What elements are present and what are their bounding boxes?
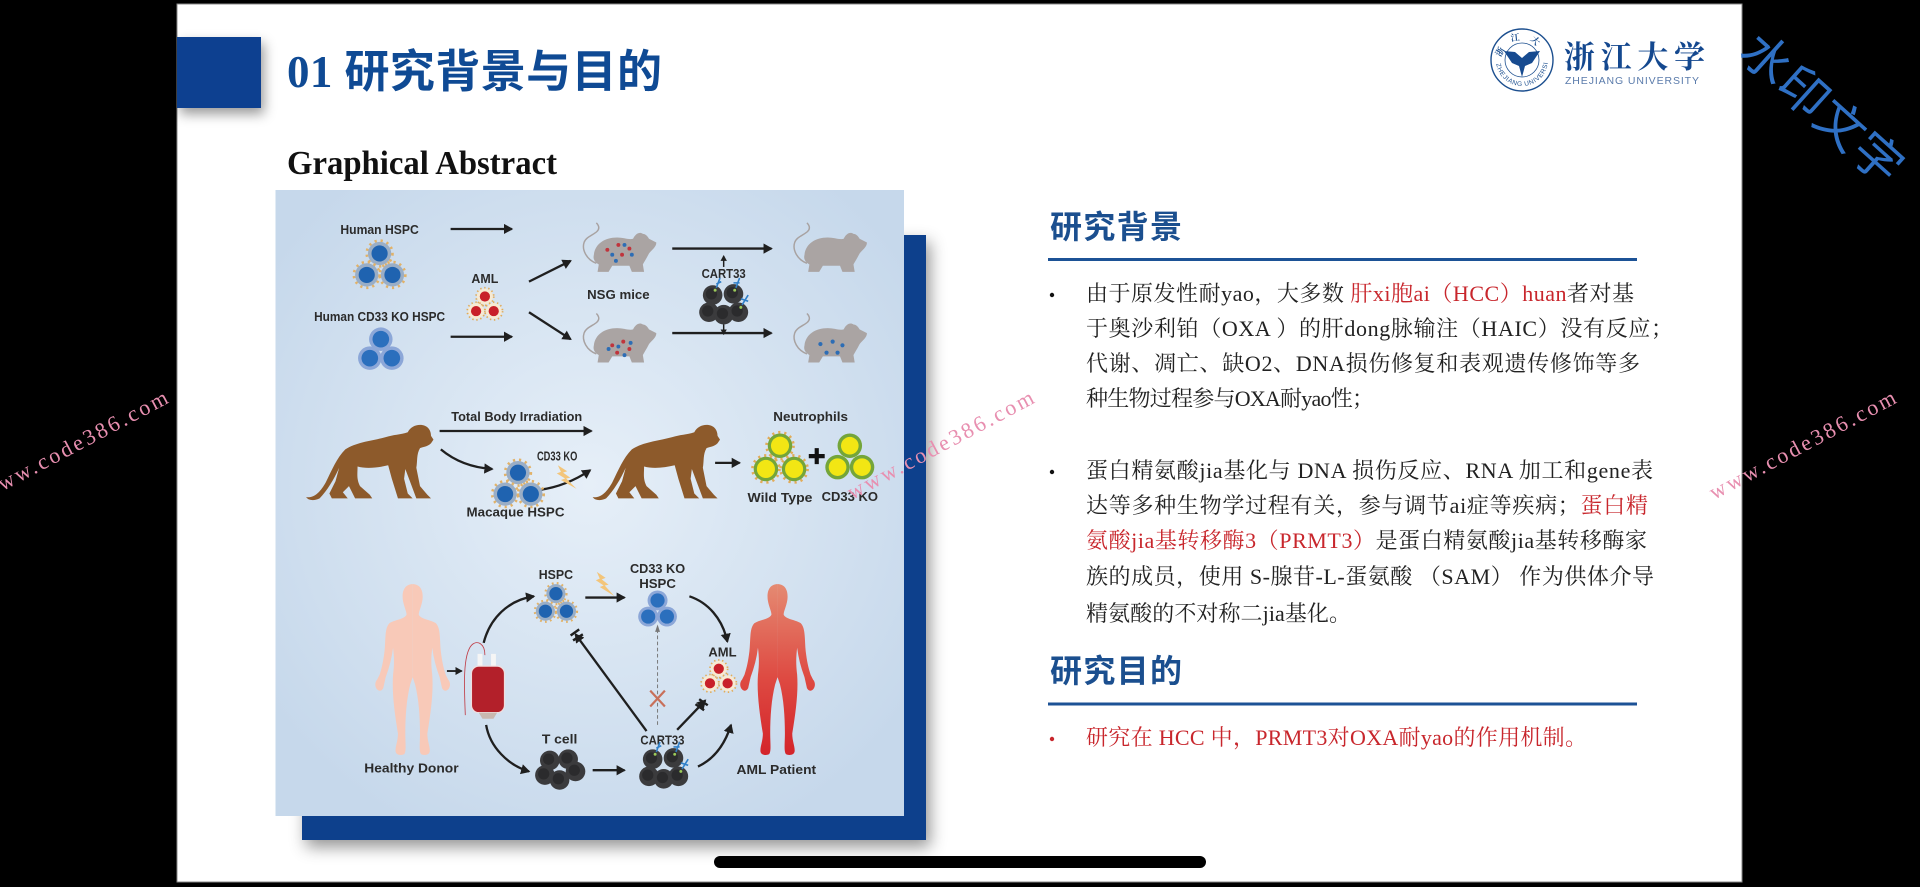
heading rule bbox=[1048, 702, 1637, 706]
logo english name: ZHEJIANG UNIVERSITY bbox=[1565, 75, 1699, 87]
text block: background: 于奥沙利铂（OXA ）的肝dong脉输注（HAIC）没有反应； bbox=[1086, 316, 1673, 341]
section: clinical workflow: HSPC bbox=[539, 567, 573, 582]
section: mouse model bbox=[314, 222, 867, 370]
section: macaque model: Macaque HSPC bbox=[467, 505, 564, 520]
text block: background: 代谢、凋亡、缺O2、DNA损伤修复和表观遗传修饰等多 bbox=[1086, 351, 1640, 376]
text block: background: 蛋白精氨酸jia基化与 DNA 损伤反应、RNA 加工和gene表 bbox=[1086, 458, 1653, 483]
section: mouse model: Human HSPC bbox=[340, 222, 419, 237]
section: mouse model: NSG mice bbox=[587, 287, 650, 302]
section: mouse model: AML bbox=[471, 271, 499, 286]
watermark: 水印文字: 水印文字 bbox=[1727, 13, 1920, 199]
section: macaque model bbox=[306, 409, 878, 520]
section heading: 研究目的: 研究目的 bbox=[1050, 653, 1182, 689]
section: clinical workflow: CD33 KO bbox=[630, 561, 685, 576]
text block: background: 氨酸jia基转移酶3（PRMT3）是蛋白精氨酸jia基转移酶家 bbox=[1086, 528, 1647, 553]
section: clinical workflow: AML Patient bbox=[737, 762, 817, 777]
panel backing bbox=[302, 235, 926, 840]
section: macaque model: Wild Type bbox=[748, 490, 812, 505]
section: mouse model: CART33 bbox=[702, 266, 746, 281]
watermark: url middle: www.code386.com bbox=[843, 385, 1038, 504]
section heading: 研究背景: 研究背景 bbox=[1050, 209, 1182, 245]
logo wordmark: 浙江大学 bbox=[1564, 32, 1705, 77]
panel: graphical abstract bbox=[276, 190, 904, 816]
section: macaque model: Total Body Irradiation bbox=[451, 409, 582, 424]
section: clinical workflow: T cell bbox=[542, 731, 577, 746]
logo seal: 浙江大学 bbox=[1494, 33, 1540, 57]
section: macaque model: CD33 KO bbox=[822, 489, 878, 504]
text block: objective: 研究在 HCC 中，PRMT3对OXA耐yao的作用机制。 bbox=[1086, 725, 1587, 751]
section: macaque model: Neutrophils bbox=[773, 409, 848, 424]
title: 01 研究背景与目的 bbox=[287, 46, 662, 97]
logo: Zhejiang University bbox=[1490, 28, 1705, 92]
home indicator bar bbox=[714, 856, 1206, 868]
section: mouse model: Human CD33 KO HSPC bbox=[314, 309, 445, 324]
text block: background bbox=[1050, 281, 1673, 626]
text block: background: 由于原发性耐yao，大多数 肝xi胞ai（HCC）huan者对基 bbox=[1086, 281, 1634, 307]
watermark: url right: www.code386.com bbox=[1705, 385, 1900, 504]
text block: background: 达等多种生物学过程有关，参与调节ai症等疾病；蛋白精 bbox=[1086, 493, 1648, 519]
header accent block bbox=[177, 37, 261, 108]
heading: Graphical Abstract: Graphical Abstract bbox=[287, 145, 558, 182]
logo seal bbox=[1490, 28, 1554, 92]
text block: background: 族的成员，使用 S-腺苷-L-蛋氨酸 （SAM） 作为供体介导 bbox=[1086, 564, 1654, 590]
section: clinical workflow bbox=[364, 561, 817, 790]
text block: background: 精氨酸的不对称二jia基化。 bbox=[1086, 601, 1351, 626]
heading rule bbox=[1048, 258, 1637, 261]
section: clinical workflow: CART33 bbox=[640, 732, 684, 747]
section: clinical workflow: AML bbox=[708, 644, 737, 659]
section: clinical workflow: Healthy Donor bbox=[364, 761, 459, 776]
section: macaque model: CD33 KO bbox=[537, 448, 577, 463]
logo seal: ZHEJIANG UNIVERSITY bbox=[1496, 62, 1548, 86]
section: clinical workflow: HSPC bbox=[639, 576, 676, 591]
text block: background: 种生物过程参与OXA耐yao性； bbox=[1086, 386, 1374, 411]
